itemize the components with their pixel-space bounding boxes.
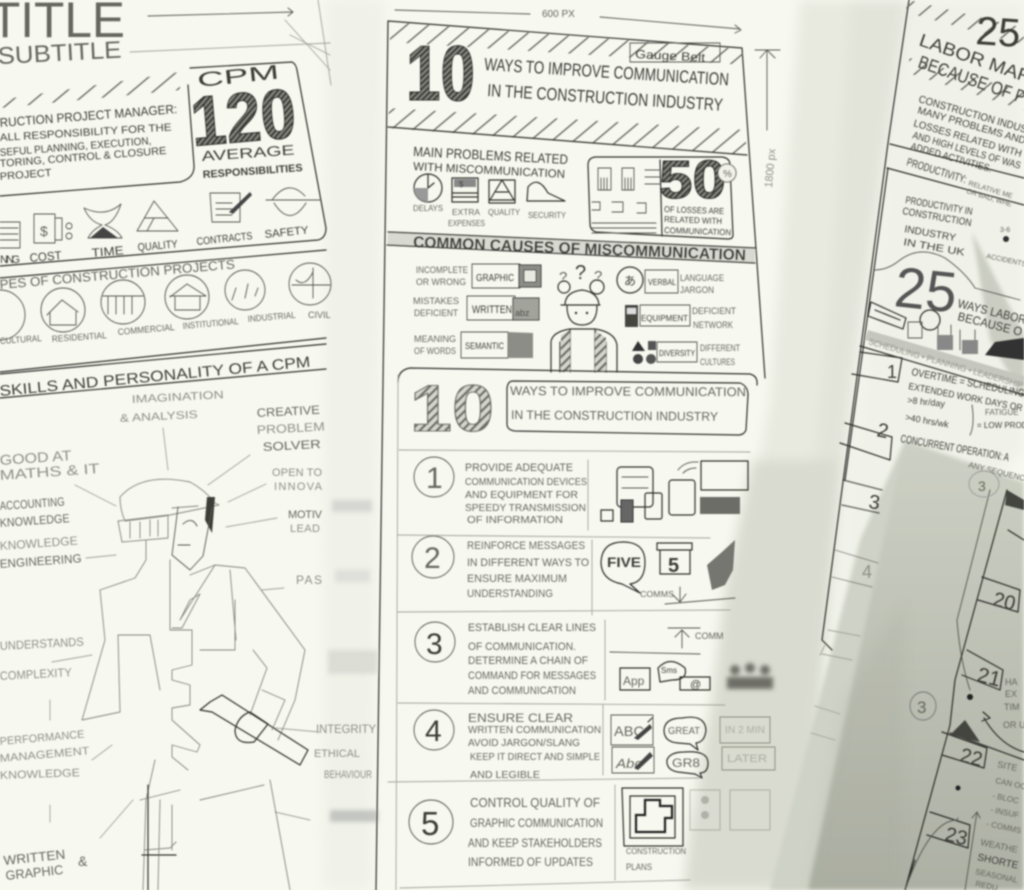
Gauge Belt tag xyxy=(630,43,720,65)
skills banner: SKILLS AND PERSONALITY OF A CPM xyxy=(0,354,311,400)
causes right column: あ xyxy=(624,274,636,288)
skills banner xyxy=(0,338,326,400)
lower sheet numbers: EX xyxy=(1005,689,1017,699)
responsibility icons: CONTRACTS xyxy=(196,230,253,248)
responsibility icons: SAFETY xyxy=(264,224,310,241)
lower sheet numbers: TIM xyxy=(1004,702,1020,712)
ten ways header xyxy=(398,368,757,445)
50 percent losses panel: COMMUNICATION xyxy=(664,225,731,237)
problem icons: QUALITY xyxy=(488,207,520,217)
main problems heading: WITH MISCOMMUNICATION xyxy=(413,161,565,181)
way 1 xyxy=(414,457,748,526)
types of construction projects: INDUSTRIAL xyxy=(247,310,296,324)
types of construction projects: INSTITUTIONAL xyxy=(182,316,239,331)
productivity banner: RELATIVE ME xyxy=(967,180,1014,200)
problem icons: SECURITY xyxy=(528,210,566,220)
skill labels: MANAGEMENT xyxy=(0,745,90,765)
skill labels: CREATIVE xyxy=(256,403,320,420)
skill labels: & xyxy=(78,853,88,869)
left title: SUBTITLE xyxy=(0,37,122,70)
right header: 25 xyxy=(974,9,1022,56)
numbered items: FATIGUE xyxy=(985,408,1019,417)
way 1: PROVIDE ADEQUATE xyxy=(465,462,573,474)
way 3: COMM xyxy=(695,631,724,641)
way 3: OF COMMUNICATION. xyxy=(468,641,576,653)
right sheet xyxy=(811,0,1024,890)
way 1: AND EQUIPMENT FOR xyxy=(465,490,578,501)
way 4 xyxy=(414,710,775,781)
50 percent losses panel xyxy=(588,150,736,239)
lower sheet numbers: SITE xyxy=(997,759,1018,773)
responsibility icons: QUALITY xyxy=(137,238,179,254)
way 5: AND KEEP STAKEHOLDERS xyxy=(468,838,602,850)
way 2: REINFORCE MESSAGES xyxy=(467,540,585,552)
center infographic sheet xyxy=(376,9,780,890)
lower sheet numbers: - INSUF xyxy=(990,805,1020,820)
right intro text: MANY PROBLEMS AND xyxy=(916,105,1024,147)
main problems heading: MAIN PROBLEMS RELATED xyxy=(413,144,569,167)
responsibility icons: COST xyxy=(29,248,63,265)
ten ways header: IN THE CONSTRUCTION INDUSTRY xyxy=(511,408,719,424)
responsibility icons: $ xyxy=(40,223,48,239)
lower sheet numbers: - BLOC xyxy=(992,791,1020,806)
types of construction projects: CULTURAL xyxy=(0,333,42,346)
right header xyxy=(905,0,1024,110)
50 percent losses panel: OF LOSSES ARE xyxy=(664,204,725,216)
sheet frame and size marks xyxy=(376,9,780,890)
way 1: SPEEDY TRANSMISSION xyxy=(465,503,586,514)
Gauge Belt tag: Gauge Belt xyxy=(635,47,706,65)
causes left column: INCOMPLETE xyxy=(416,265,468,275)
causes right column: VERBAL xyxy=(648,277,676,287)
skill labels: PERFORMANCE xyxy=(0,729,85,748)
left ghost text xyxy=(328,500,378,822)
way 5: INFORMED OF UPDATES xyxy=(468,857,593,869)
left sheet xyxy=(0,0,378,890)
skill labels xyxy=(0,389,376,883)
productivity in UK xyxy=(901,195,1024,268)
skill labels: LEAD xyxy=(290,523,320,535)
skill labels: ETHICAL xyxy=(314,748,360,760)
50 percent losses panel: % xyxy=(723,169,732,180)
skill labels: INTEGRITY xyxy=(316,722,376,736)
main title xyxy=(484,54,730,115)
skill labels: ACCOUNTING xyxy=(0,494,65,513)
causes left column: abz xyxy=(515,308,530,318)
productivity banner: PRODUCTIVITY: xyxy=(905,156,968,186)
paper layers xyxy=(322,0,1024,890)
numbered items: 1 xyxy=(887,362,897,382)
way 2: 2 xyxy=(424,542,441,575)
skill labels: MOTIV xyxy=(288,509,323,521)
problem icons: EXTRA xyxy=(452,207,480,217)
productivity in UK: INDUSTRY xyxy=(903,224,957,244)
numbered items xyxy=(840,352,1024,484)
skill labels: MATHS & IT xyxy=(0,460,101,483)
way 5: 5 xyxy=(421,805,439,842)
way 3 xyxy=(415,622,773,697)
blurred bottom shading xyxy=(808,600,905,890)
types of construction projects xyxy=(0,250,331,346)
lower sheet numbers: 23 xyxy=(943,824,970,850)
way 4: LATER xyxy=(727,753,767,765)
way 4: GR8 xyxy=(672,756,700,770)
50 percent losses panel: RELATED WITH xyxy=(664,214,722,226)
left title xyxy=(0,0,293,70)
ten ways header: WAYS TO IMPROVE COMMUNICATION xyxy=(510,384,746,399)
skill labels: SOLVER xyxy=(262,437,321,454)
causes right column: DIVERSITY xyxy=(659,348,695,358)
way 4: WRITTEN COMMUNICATION xyxy=(468,725,601,736)
way 4: AND LEGIBLE xyxy=(470,770,540,781)
way 3: @ xyxy=(690,679,701,691)
way 2: IN DIFFERENT WAYS TO xyxy=(467,557,589,569)
skill labels: INNOVA xyxy=(274,481,323,493)
CPM 120 card: AVERAGE xyxy=(201,142,295,164)
description box xyxy=(0,85,194,196)
common causes banner: COMMON CAUSES OF MISCOMMUNICATION xyxy=(413,234,746,264)
lower sheet numbers: 3 xyxy=(917,698,926,717)
productivity in UK: 3-6 xyxy=(1000,227,1010,234)
description box: TORING, CONTROL & CLOSURE xyxy=(0,145,167,170)
productivity in UK: PRODUCTIVITY IN xyxy=(904,195,973,218)
lower sheet numbers: WEATHE xyxy=(980,837,1019,855)
lower sheet numbers: SHORTE xyxy=(976,852,1020,872)
way 4: IN 2 MIN xyxy=(725,725,765,736)
lower sheet numbers: HA xyxy=(1005,677,1018,687)
CPM 120 card xyxy=(0,62,326,266)
confused worker: ? xyxy=(559,269,567,286)
problem icons: EXPENSES xyxy=(448,218,485,228)
causes left column: SEMANTIC xyxy=(465,341,504,352)
causes right column: EQUIPMENT xyxy=(641,313,688,323)
causes left column xyxy=(413,264,541,358)
left header hatching xyxy=(0,72,180,108)
right intro text xyxy=(909,93,1024,175)
way 3: AND COMMUNICATION xyxy=(468,685,576,697)
confused worker: ? xyxy=(575,262,586,284)
productivity in UK: IN THE UK xyxy=(902,237,966,259)
skill labels: BEHAVIOUR xyxy=(324,769,372,781)
problem icons: DELAYS xyxy=(413,203,443,213)
way 4: AVOID JARGON/SLANG xyxy=(468,738,580,749)
skill labels: WRITTEN xyxy=(3,847,66,868)
CPM 120 card: 120 xyxy=(188,74,299,161)
skill labels: UNDERSTANDS xyxy=(0,635,84,653)
way 3: COMMAND FOR MESSAGES xyxy=(468,670,596,682)
causes left column: WRITTEN xyxy=(472,304,512,316)
way 2: ENSURE MAXIMUM xyxy=(467,573,567,585)
numbered items: >40 hrs/wk xyxy=(905,412,950,430)
faded number tabs xyxy=(811,480,882,740)
skill labels: KNOWLEDGE xyxy=(0,511,70,530)
causes right column: CULTURES xyxy=(700,357,735,367)
way 2: UNDERSTANDING xyxy=(467,588,553,600)
way 2 xyxy=(412,536,735,604)
lower sheet numbers xyxy=(905,471,1024,890)
way 4: Abc xyxy=(615,756,643,771)
lower sheet numbers: 22 xyxy=(958,745,985,771)
way 1: COMMUNICATION DEVICES xyxy=(465,477,587,488)
lower sheet numbers: SEASONAL xyxy=(975,867,1019,885)
CPM 120 card: CPM xyxy=(196,62,280,92)
causes right column: NETWORK xyxy=(693,320,733,330)
causes left column: GRAPHIC xyxy=(476,272,514,284)
big number 10: 10 xyxy=(406,29,475,117)
way 1: OF INFORMATION xyxy=(467,515,563,526)
ten ways header: 10 xyxy=(410,371,494,445)
skill labels: ENGINEERING xyxy=(0,551,82,571)
skill labels: COMPLEXITY xyxy=(0,665,72,683)
right intro text: ADDED ACTIVITIES. xyxy=(909,141,993,175)
confused worker xyxy=(551,262,617,372)
lower sheet numbers: 20 xyxy=(991,589,1018,615)
skill labels: GOOD AT xyxy=(0,447,73,468)
numbered items: >8 hr/day xyxy=(907,395,946,409)
top hatched band xyxy=(388,22,747,155)
skill pointer lines xyxy=(50,428,319,838)
way 5: CONTROL QUALITY OF xyxy=(470,795,600,810)
way 4: GREAT xyxy=(668,725,701,737)
right sheet edge xyxy=(822,0,909,650)
main problems heading xyxy=(413,144,569,181)
types of construction projects: CIVIL xyxy=(308,310,331,320)
way 3: 3 xyxy=(426,628,443,661)
description box: RUCTION PROJECT MANAGER: xyxy=(0,102,178,130)
types of construction projects: PES OF CONSTRUCTION PROJECTS xyxy=(0,256,236,292)
description box: ALL RESPONSIBILITY FOR THE xyxy=(0,122,172,144)
confused worker: ? xyxy=(594,268,602,285)
skill labels: GRAPHIC xyxy=(5,862,64,883)
way 2: FIVE xyxy=(607,554,641,570)
way 3: ESTABLISH CLEAR LINES xyxy=(468,622,596,634)
right header: LABOR MAR xyxy=(917,30,1024,87)
way 3: DETERMINE A CHAIN OF xyxy=(468,655,588,667)
lower 25 ways heading xyxy=(860,252,1024,395)
main title: WAYS TO IMPROVE COMMUNICATION xyxy=(484,54,730,89)
responsibility icons xyxy=(0,188,320,266)
way 4: ABC xyxy=(614,723,644,739)
causes left column: OF WORDS xyxy=(414,346,456,356)
productivity banner: OR BAD, WHE xyxy=(965,188,1013,209)
causes left column: MEANING xyxy=(414,334,456,344)
problem icons xyxy=(413,174,566,228)
lower sheet numbers: 3 xyxy=(978,478,986,494)
way 3: Sms xyxy=(661,666,677,675)
lower sheet numbers: 21 xyxy=(975,664,1003,692)
causes right column: DEFICIENT xyxy=(692,306,736,316)
way 3: App xyxy=(623,674,645,688)
way 1: 1 xyxy=(426,462,443,495)
lower 25 ways heading: 25 xyxy=(892,255,960,325)
sheet frame and size marks: 600 PX xyxy=(542,9,575,20)
numbered items: 2 xyxy=(875,419,890,443)
row dividers and guides xyxy=(388,375,750,890)
types of construction projects: COMMERCIAL xyxy=(117,322,175,337)
skill labels: & ANALYSIS xyxy=(120,409,198,425)
way 4: KEEP IT DIRECT AND SIMPLE xyxy=(470,752,600,763)
way 5: PLANS xyxy=(626,862,652,872)
description box: SEFUL PLANNING, EXECUTION, xyxy=(0,135,152,159)
way 5: CONSTRUCTION xyxy=(626,846,686,856)
skill labels: IMAGINATION xyxy=(132,389,224,406)
right intro text: LOSSES RELATED WITH xyxy=(912,118,1023,160)
way 2: 5 xyxy=(668,555,679,577)
skill labels: KNOWLEDGE xyxy=(0,767,80,782)
causes left column: DEFICIENT xyxy=(414,308,458,318)
description box: PROJECT xyxy=(0,167,53,183)
faded number tabs: 3 xyxy=(867,491,881,514)
main title: IN THE CONSTRUCTION INDUSTRY xyxy=(487,80,724,115)
causes right column: LANGUAGE xyxy=(680,273,724,283)
way 4: ENSURE CLEAR xyxy=(468,711,573,725)
causes right column: JARGON xyxy=(680,285,714,295)
CPM 120 card: RESPONSIBILITIES xyxy=(202,162,303,181)
causes left column: MISTAKES xyxy=(413,296,459,306)
architect figure drawing xyxy=(82,479,308,890)
50 percent losses panel: 50 xyxy=(659,150,726,210)
skill labels: PROBLEM xyxy=(256,419,325,437)
faded number tabs: 4 xyxy=(862,562,872,582)
skill labels: OPEN TO xyxy=(272,467,322,479)
way 2: COMMS xyxy=(640,590,674,599)
responsibility icons: TIME xyxy=(91,243,124,260)
way 5 xyxy=(409,788,770,872)
productivity banner xyxy=(887,144,1024,209)
skill labels: PAS xyxy=(296,573,322,587)
way 4: 4 xyxy=(425,715,442,748)
skill labels: KNOWLEDGE xyxy=(0,534,78,553)
responsibility icons: NING xyxy=(0,254,20,266)
causes right column xyxy=(617,267,740,367)
problem icons: $ xyxy=(459,180,464,189)
causes left column: OR WRONG xyxy=(416,277,466,287)
way 5: GRAPHIC COMMUNICATION xyxy=(470,818,603,830)
productivity in UK: CONSTRUCTION xyxy=(901,206,972,229)
lower sheet numbers: - COMMS xyxy=(986,819,1022,835)
types of construction projects: RESIDENTIAL xyxy=(51,330,107,344)
sheet frame and size marks: 1800 px xyxy=(763,148,778,188)
causes right column: DIFFERENT xyxy=(700,343,740,353)
